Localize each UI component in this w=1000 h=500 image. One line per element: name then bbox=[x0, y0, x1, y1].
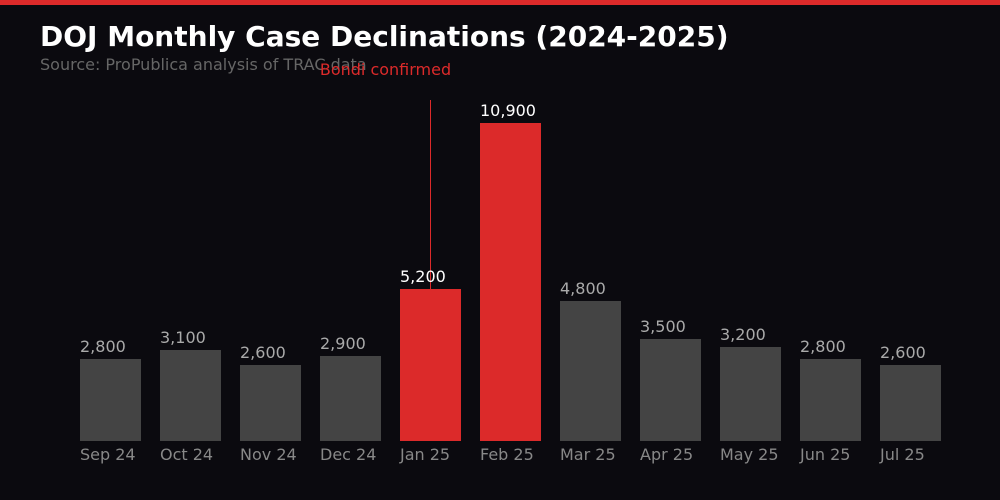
bar: Jan 25: 5,200 bbox=[400, 267, 446, 286]
bar: Feb 25 bbox=[480, 101, 541, 464]
bar: Jan 25: Jan 25 bbox=[399, 445, 450, 464]
bar: Jan 25 bbox=[399, 267, 461, 464]
bar: Oct 24: Oct 24 bbox=[160, 445, 213, 464]
bar: Jul 25: Jul 25 bbox=[879, 445, 925, 464]
bar: Jun 25: 2,800 bbox=[800, 337, 846, 356]
bar: Oct 24: 3,100 bbox=[160, 328, 206, 347]
bar: Mar 25: Mar 25 bbox=[560, 445, 616, 464]
bar: Mar 25: 4,800 bbox=[560, 279, 606, 298]
bar: Feb 25: 10,900 bbox=[480, 101, 536, 120]
bar: Jun 25 bbox=[799, 337, 861, 464]
bar: May 25 bbox=[720, 325, 781, 464]
bar: Apr 25: 3,500 bbox=[640, 317, 686, 336]
bar: Apr 25 bbox=[640, 317, 701, 464]
bar: Sep 24: 2,800 bbox=[80, 337, 126, 356]
bar: Dec 24 bbox=[320, 334, 381, 464]
bar chart bbox=[80, 101, 941, 464]
bar: Jun 25: Jun 25 bbox=[799, 445, 850, 464]
bar: Nov 24: Nov 24 bbox=[240, 445, 297, 464]
title: DOJ Monthly Case Declinations (2024-2025) bbox=[40, 20, 729, 53]
annotation: Bondi confirmed: Bondi confirmed bbox=[320, 60, 451, 79]
subtitle: Source: ProPublica analysis of TRAC data bbox=[40, 55, 367, 74]
bar: Dec 24: Dec 24 bbox=[320, 445, 376, 464]
bar: Jul 25 bbox=[879, 343, 941, 464]
bar: Jul 25: 2,600 bbox=[880, 343, 926, 362]
bar: Nov 24 bbox=[240, 343, 301, 464]
bar: Sep 24 bbox=[80, 337, 141, 464]
bar: May 25: May 25 bbox=[720, 445, 779, 464]
top accent bar bbox=[0, 0, 1000, 5]
bar: Nov 24: 2,600 bbox=[240, 343, 286, 362]
bar: Apr 25: Apr 25 bbox=[640, 445, 693, 464]
bar: Oct 24 bbox=[160, 328, 221, 464]
bar: Dec 24: 2,900 bbox=[320, 334, 366, 353]
bar: Mar 25 bbox=[560, 279, 621, 464]
bar: Sep 24: Sep 24 bbox=[80, 445, 136, 464]
bar: May 25: 3,200 bbox=[720, 325, 766, 344]
bar: Feb 25: Feb 25 bbox=[480, 445, 534, 464]
